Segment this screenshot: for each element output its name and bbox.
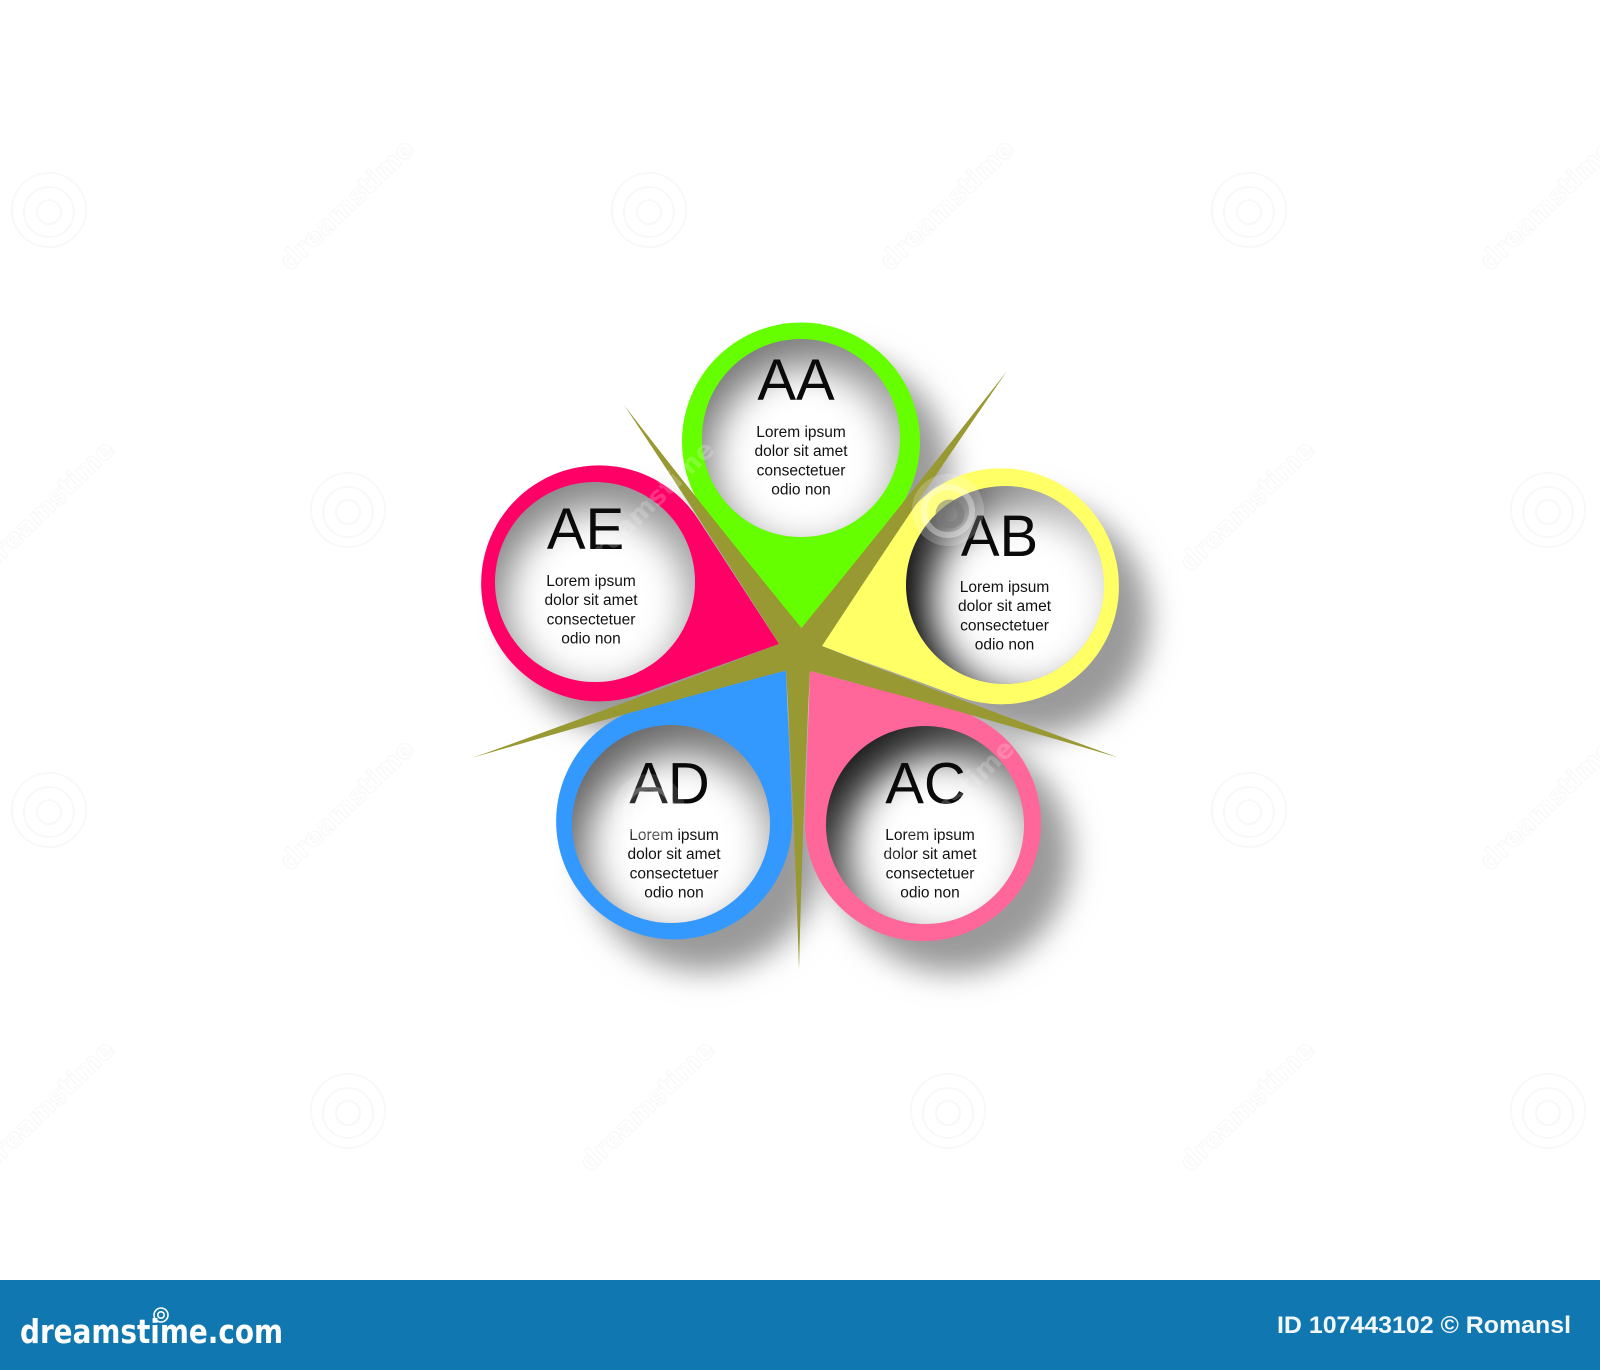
label AB block: AB (961, 504, 1038, 569)
label AC block: Lorem ipsum (885, 827, 975, 844)
background watermark pattern: dreamstime (274, 734, 421, 877)
background watermark pattern (0, 134, 1600, 1178)
watermark text over pink petal: dreamstime (874, 734, 1021, 877)
label AC block: AC (885, 752, 966, 816)
label AD block: Lorem ipsum (629, 827, 719, 844)
label AD block: odio non (644, 884, 704, 902)
label AB block: odio non (975, 636, 1034, 654)
footer logo text: dreamstime.com (20, 1312, 283, 1351)
label AA block: odio non (771, 482, 831, 498)
label AB block: Lorem ipsum (960, 579, 1049, 596)
background watermark pattern: dreamstime (1174, 1035, 1321, 1178)
drop shadow behind petals (511, 355, 1149, 973)
label AA block: Lorem ipsum (756, 424, 846, 441)
label AA block: consectetuer (757, 462, 845, 480)
background watermark pattern: dreamstime (274, 134, 421, 277)
label AE block: Lorem ipsum (546, 573, 636, 590)
label AA block: dolor sit amet (754, 443, 848, 460)
label AA block (754, 348, 848, 498)
label AC block: dolor sit amet (883, 846, 977, 863)
petal AA (green) (682, 323, 920, 628)
watermark swirl over yellow petal (912, 474, 984, 546)
label AD block (627, 752, 721, 902)
label AD block: AD (629, 752, 710, 816)
footer bar (0, 1280, 1600, 1370)
label AE block (544, 497, 638, 648)
label AC block (883, 752, 977, 902)
label AC block: odio non (900, 884, 960, 902)
label AE block: consectetuer (547, 612, 635, 628)
label AB block: dolor sit amet (958, 598, 1052, 615)
footer logo swirl icon (154, 1308, 168, 1322)
petal AC (pink) (805, 671, 1041, 941)
label AA block: AA (757, 348, 835, 413)
watermark swirl over blue petal (613, 774, 685, 846)
label AB block: consectetuer (960, 618, 1049, 634)
infographic canvas (0, 322, 1600, 1370)
background watermark pattern: dreamstime (574, 1035, 721, 1178)
watermark text over green and crimson petals: dreamstime (574, 435, 721, 578)
label AC block: consectetuer (886, 866, 974, 882)
footer image id and credit: ID 107443102 © Romansl (1277, 1312, 1571, 1339)
petal AE (crimson) (481, 465, 779, 701)
petal AB (yellow) (822, 468, 1119, 704)
petal AD (blue) (556, 670, 792, 939)
label AE block: AE (547, 497, 624, 562)
label AE block: dolor sit amet (544, 592, 638, 609)
olive five-point star divider (473, 371, 1118, 970)
background watermark pattern: dreamstime (874, 134, 1021, 277)
background watermark pattern: dreamstime (1174, 435, 1321, 578)
label AD block: dolor sit amet (627, 846, 721, 863)
label AB block (958, 504, 1052, 654)
label AD block: consectetuer (630, 866, 718, 882)
label AE block: odio non (561, 630, 621, 648)
